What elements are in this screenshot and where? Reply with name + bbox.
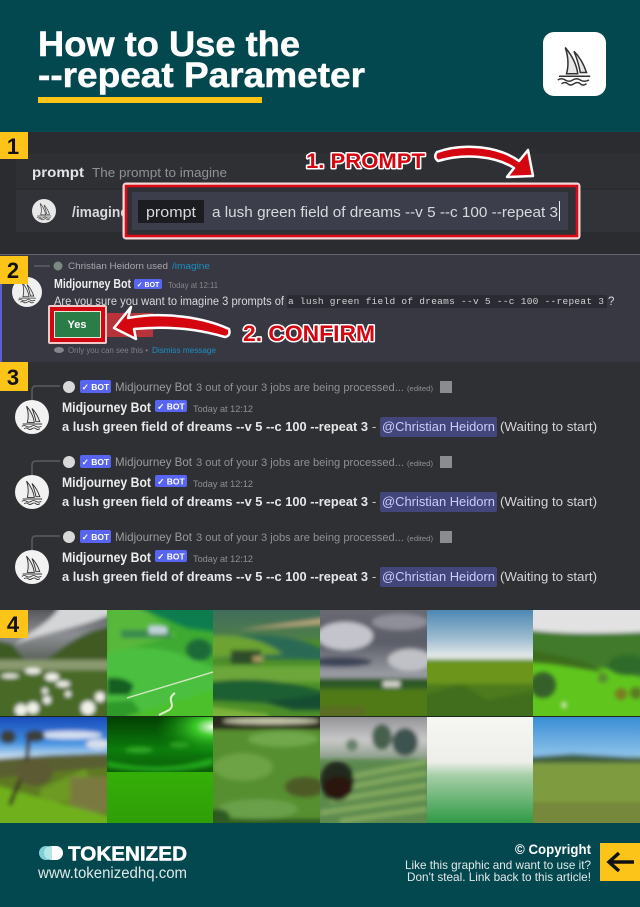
Yes button with red highlight: Yes (68, 319, 86, 331)
image: tree under deep blue sky (0, 717, 107, 823)
message 2: Midjourney Bot (62, 475, 151, 490)
message 1: Today at 12:12 (193, 404, 253, 415)
used command line: /imagine (172, 261, 210, 272)
image: meadow with daisies (0, 610, 107, 716)
ephemeral note: Only you can see this • (68, 346, 148, 355)
message 1 (15, 380, 597, 437)
callout: 1. PROMPT: 1. PROMPT (306, 150, 425, 173)
message 3: Today at 12:12 (193, 554, 253, 565)
title: How to Use the (38, 25, 300, 64)
bot avatar (12, 277, 42, 307)
ghost red button (104, 313, 153, 337)
bot name line: Today at 12:11 (168, 281, 219, 290)
message 3: - (372, 569, 376, 584)
prompt label (32, 164, 227, 180)
bot name line: ✓ BOT (137, 282, 160, 289)
message 1: (edited) (407, 384, 434, 393)
icon: back arrow (600, 843, 640, 881)
title: --repeat Parameter (38, 56, 365, 95)
image: green field under blue sky (427, 610, 533, 716)
message 1: 3 out of your 3 jobs are being processed... (196, 382, 404, 394)
avatar and command (32, 199, 128, 223)
header background (0, 0, 640, 132)
message 2: Today at 12:12 (193, 479, 253, 490)
message 3: 3 out of your 3 jobs are being processed... (196, 532, 404, 544)
image: flower field (213, 717, 320, 823)
message 1: ✓ BOT (82, 382, 110, 392)
message 1: Midjourney Bot (62, 400, 151, 415)
step badge 1: 1 (7, 134, 19, 159)
prompt label: prompt (32, 164, 84, 180)
image: shaded green hills (213, 610, 320, 716)
message 3: (edited) (407, 534, 434, 543)
image: misty terraced field with trees (320, 717, 427, 823)
step badge 4 (0, 610, 28, 638)
message 3 (15, 530, 597, 587)
step badge 3 (0, 362, 28, 391)
arrow: to Yes button (114, 307, 230, 339)
step badge 4: 4 (7, 612, 20, 637)
ephemeral note (54, 346, 217, 355)
footer logo: TOKENIZED (68, 844, 187, 866)
confirmation question (54, 295, 614, 308)
ephemeral note: Dismiss message (152, 346, 217, 355)
message 1: (Waiting to start) (500, 419, 597, 434)
message 1: Midjourney Bot (115, 380, 193, 394)
prompt input with red highlight: prompt (146, 205, 196, 221)
image: rolling green hills with road (107, 610, 213, 716)
panel: step 3 jobs (0, 362, 640, 610)
panel: step 1 prompt (0, 132, 640, 254)
image: white sky over green field (427, 717, 533, 823)
step badge 1 (0, 132, 28, 159)
step badge 2: 2 (7, 258, 19, 283)
icon: Midjourney logo (543, 32, 606, 96)
message 1: ✓ BOT (157, 402, 186, 412)
image: olive field under blue sky (533, 717, 640, 823)
step badge 3: 3 (7, 365, 19, 390)
bot name line (54, 277, 219, 291)
message 3: Midjourney Bot (115, 530, 193, 544)
message 1: @Christian Heidorn (382, 419, 495, 434)
copyright note: © Copyright (515, 842, 591, 857)
message 2: - (372, 494, 376, 509)
confirmation question: a lush green field of dreams --v 5 --c 100 --repeat 3 (288, 296, 604, 307)
message 1: a lush green field of dreams --v 5 --c 100 --repeat 3 (62, 419, 368, 434)
callout: 2. CONFIRM: 2. CONFIRM (243, 321, 375, 346)
message 2: ✓ BOT (157, 476, 186, 486)
copyright note: Don't steal. Link back to this article! (407, 870, 591, 884)
image: abstract bright green (107, 717, 213, 823)
message 2: 3 out of your 3 jobs are being processed... (196, 457, 404, 469)
message 2 (15, 455, 597, 512)
message 3: ✓ BOT (157, 552, 186, 562)
arrow: to prompt box (435, 147, 533, 177)
footer website: www.tokenizedhq.com (37, 865, 187, 882)
confirmation question: Are you sure you want to imagine 3 prompts of (54, 296, 285, 308)
used command line: Christian Heidorn used (68, 261, 168, 272)
message 2: ✓ BOT (82, 457, 110, 467)
message 3: Midjourney Bot (62, 550, 151, 565)
avatar and command: /imagine (72, 205, 128, 221)
panel: generated images (0, 605, 640, 828)
step badge 2 (0, 256, 28, 284)
panel: step 2 confirm (0, 254, 640, 362)
copyright note: Like this graphic and want to use it? (405, 858, 591, 872)
message 2: (edited) (407, 459, 434, 468)
image: stormy sky over field (320, 610, 427, 716)
bot name line: Midjourney Bot (54, 277, 132, 291)
footer background (0, 823, 640, 907)
prompt input with red highlight (124, 184, 579, 238)
message 2: a lush green field of dreams --v 5 --c 100 --repeat 3 (62, 494, 368, 509)
used command line (34, 261, 210, 272)
image: valley with trees (533, 610, 640, 716)
title underline (38, 97, 262, 103)
message 2: (Waiting to start) (500, 494, 597, 509)
message 3: @Christian Heidorn (382, 569, 495, 584)
prompt label: The prompt to imagine (92, 166, 227, 180)
prompt input with red highlight: a lush green field of dreams --v 5 --c 100 --repeat 3 (212, 205, 558, 221)
message 2: Midjourney Bot (115, 455, 193, 469)
message 2: @Christian Heidorn (382, 494, 495, 509)
title (38, 25, 365, 95)
message 3: (Waiting to start) (500, 569, 597, 584)
Yes button with red highlight (48, 305, 107, 344)
confirmation question: ? (608, 296, 614, 308)
message 3: a lush green field of dreams --v 5 --c 100 --repeat 3 (62, 569, 368, 584)
copyright note (405, 842, 591, 884)
message 1: - (372, 419, 376, 434)
message 3: ✓ BOT (82, 532, 110, 542)
